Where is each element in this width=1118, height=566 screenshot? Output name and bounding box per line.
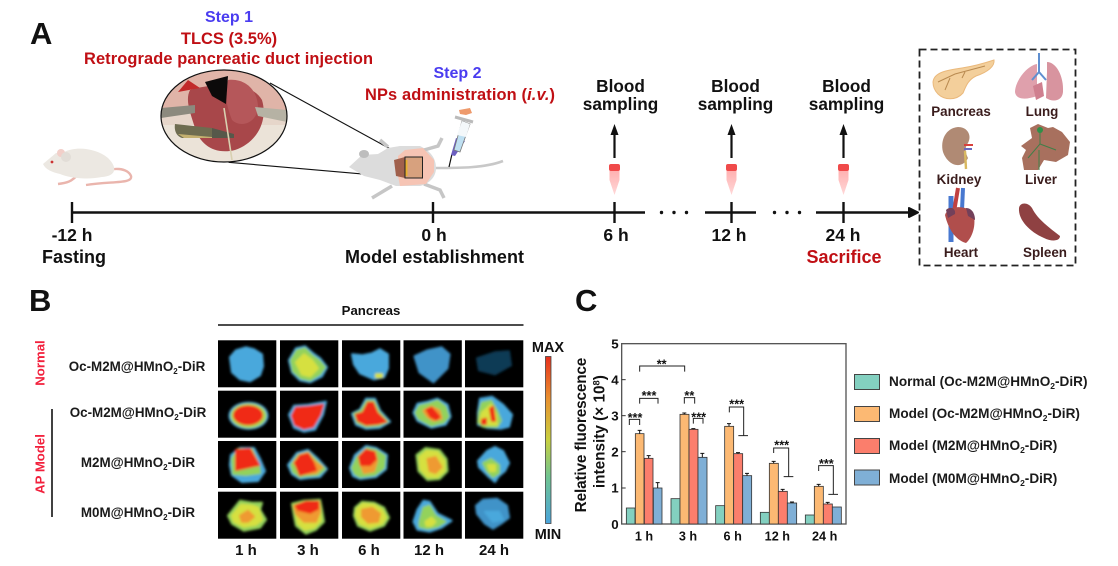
- zoom connector lines: [229, 83, 405, 178]
- y axis ticks: 2: [611, 445, 619, 460]
- x axis labels: [635, 529, 837, 543]
- hour labels: 24 h: [479, 542, 509, 559]
- icon: spleen: [1019, 204, 1060, 240]
- significance brackets: ***: [819, 457, 834, 471]
- image grid: [218, 340, 523, 539]
- significance brackets: ***: [642, 389, 656, 403]
- tile: Normal 6 h: [342, 340, 400, 387]
- legend: 2: [1020, 478, 1025, 488]
- y axis ticks: 1: [611, 481, 619, 496]
- tile: M0M 24 h: [465, 492, 523, 539]
- panel letter B: B: [29, 283, 51, 318]
- label: pancreas: Pancreas: [931, 104, 991, 119]
- bars: 3 h: [671, 413, 707, 524]
- row labels: M0M@HMnO: [81, 505, 163, 520]
- tile: Oc-M2M 24 h: [465, 391, 523, 438]
- icon: syringe: [449, 108, 473, 167]
- legend: -DiR): [1025, 438, 1057, 453]
- legend: 2: [1043, 413, 1048, 423]
- tile: Normal 1 h: [218, 340, 276, 387]
- tile: M2M 12 h: [404, 441, 462, 488]
- tile: M0M 3 h: [280, 492, 338, 539]
- icon: kidney: [942, 127, 973, 169]
- timeline labels: 6 h: [603, 225, 629, 245]
- x axis labels: 1 h: [635, 529, 653, 543]
- y axis title: [573, 358, 609, 512]
- bars: 6 h: [716, 424, 752, 524]
- y axis ticks: 0: [611, 517, 619, 532]
- hour labels: 6 h: [358, 542, 380, 559]
- hour labels: 3 h: [297, 542, 319, 559]
- row labels: -DiR: [179, 405, 207, 420]
- y axis title: 8: [592, 380, 602, 385]
- significance brackets: ***: [628, 411, 642, 425]
- legend: -DiR): [1025, 471, 1057, 486]
- bars: 1 h: [626, 430, 662, 524]
- row labels: 2: [163, 463, 168, 472]
- blood sampling at 12 h: [698, 76, 773, 195]
- tile: M2M 6 h: [342, 441, 400, 488]
- panel: organs box: [920, 50, 1076, 266]
- tile: M2M 1 h: [218, 441, 276, 488]
- tile: Oc-M2M 6 h: [342, 391, 400, 438]
- timeline labels: 0 h: [421, 225, 447, 245]
- x axis labels: 24 h: [812, 529, 837, 543]
- label: spleen: Spleen: [1023, 245, 1067, 260]
- legend: 2: [1050, 381, 1055, 391]
- legend: [854, 374, 1087, 488]
- tile: Oc-M2M 12 h: [404, 391, 462, 438]
- legend: Model (Oc-M2M@HMnO: [889, 406, 1043, 421]
- significance brackets: **: [684, 389, 694, 403]
- step 1 heading: Step 1: [205, 9, 253, 26]
- tile: Oc-M2M 3 h: [280, 391, 338, 438]
- timeline labels: 12 h: [711, 225, 747, 245]
- significance brackets: **: [657, 358, 667, 372]
- step 1 description: TLCS (3.5%): [181, 30, 277, 48]
- plot frame: [622, 344, 846, 524]
- significance brackets: ***: [729, 397, 744, 411]
- label: kidney: Kidney: [937, 172, 982, 187]
- colour scale bar: MAX: [532, 340, 564, 356]
- timeline labels: Sacrifice: [806, 247, 882, 267]
- row labels: -DiR: [168, 455, 195, 470]
- step 1 description: [84, 30, 373, 68]
- tile: Normal 3 h: [280, 340, 338, 387]
- timeline labels: [42, 225, 882, 267]
- icon: surgery photo in magnifier: [160, 70, 288, 165]
- timeline labels: -12 h: [52, 225, 92, 245]
- significance brackets: ***: [774, 439, 789, 453]
- blood sampling at 24 h: Blood: [822, 76, 871, 96]
- legend: Model (M2M@HMnO: [889, 438, 1020, 453]
- icon: pancreas: [933, 60, 994, 99]
- blood sampling at 6 h: [583, 76, 658, 195]
- x axis labels: 3 h: [679, 529, 697, 543]
- bars: 12 h: [760, 461, 797, 524]
- tile: M2M 3 h: [280, 441, 338, 488]
- panel B: fluorescence images: [29, 283, 564, 559]
- significance brackets: ***: [691, 411, 706, 425]
- row labels: 2: [174, 413, 179, 422]
- tile: Normal 12 h: [404, 340, 462, 387]
- timeline labels: 24 h: [825, 225, 861, 245]
- step 2 description: NPs administration (i.v.): [365, 86, 555, 104]
- hour labels: [235, 542, 509, 559]
- colour scale bar: MIN: [535, 527, 561, 543]
- icon: fasting mouse: [43, 149, 131, 185]
- heading: Pancreas: Pancreas: [342, 303, 400, 318]
- step 1 description: Retrograde pancreatic duct injection: [84, 50, 373, 68]
- blood sampling at 24 h: [809, 76, 884, 195]
- legend: Normal (Oc-M2M@HMnO: [889, 374, 1050, 389]
- legend: Model (M0M@HMnO: [889, 471, 1020, 486]
- tile: Normal 24 h: [465, 340, 523, 387]
- timeline labels: Model establishment: [345, 247, 524, 267]
- hour labels: 1 h: [235, 542, 257, 559]
- row labels: Oc-M2M@HMnO: [69, 359, 173, 374]
- hour labels: 12 h: [414, 542, 444, 559]
- colour scale bar: [532, 340, 564, 543]
- panel A: experimental timeline: [30, 9, 1076, 267]
- icon: heart: [945, 188, 975, 243]
- y axis title: ): [592, 375, 609, 380]
- tile: Oc-M2M 1 h: [218, 391, 276, 438]
- row labels: -DiR: [168, 505, 195, 520]
- y axis title: intensity (× 10: [592, 385, 609, 488]
- blood sampling at 12 h: Blood: [711, 76, 760, 96]
- panel letter C: C: [575, 283, 597, 318]
- blood sampling at 24 h: sampling: [809, 94, 884, 114]
- tile: M0M 12 h: [404, 492, 462, 539]
- y axis ticks: [611, 337, 626, 532]
- legend: -DiR): [1055, 374, 1087, 389]
- panel letter A: A: [30, 16, 52, 51]
- x axis labels: 12 h: [765, 529, 790, 543]
- tile: M0M 1 h: [218, 492, 276, 539]
- icon: lung: [1015, 53, 1063, 100]
- panel C: bar chart: [573, 283, 1087, 543]
- step 2 heading: Step 2: [433, 65, 482, 82]
- row labels: [69, 359, 207, 522]
- icon: liver: [1021, 124, 1070, 170]
- bars: 24 h: [805, 484, 841, 524]
- tile: M2M 24 h: [465, 441, 523, 488]
- blood sampling at 6 h: Blood: [596, 76, 645, 96]
- y axis ticks: 4: [611, 373, 619, 388]
- row labels: Oc-M2M@HMnO: [70, 405, 174, 420]
- significance brackets: [628, 358, 838, 494]
- tile: M0M 6 h: [342, 492, 400, 539]
- y axis title: Relative fluorescence: [573, 358, 590, 512]
- bar chart: [573, 337, 846, 543]
- row labels: 2: [173, 367, 178, 376]
- label: liver: Liver: [1025, 172, 1058, 187]
- legend: 2: [1020, 445, 1025, 455]
- blood sampling at 6 h: sampling: [583, 94, 658, 114]
- legend: -DiR): [1047, 406, 1080, 421]
- timeline axis: [72, 202, 918, 223]
- group label: Normal: Normal: [32, 340, 48, 386]
- label: lung: Lung: [1026, 104, 1058, 119]
- y axis ticks: 5: [611, 337, 619, 352]
- timeline gap dots: [660, 211, 801, 214]
- y axis ticks: 3: [611, 409, 619, 424]
- row labels: 2: [163, 513, 168, 522]
- icon: dissected mouse with syringe: [349, 138, 503, 198]
- row labels: M2M@HMnO: [81, 455, 163, 470]
- row labels: -DiR: [178, 359, 206, 374]
- label: heart: Heart: [944, 245, 979, 260]
- timeline labels: Fasting: [42, 247, 106, 267]
- blood sampling at 12 h: sampling: [698, 94, 773, 114]
- x axis labels: 6 h: [724, 529, 742, 543]
- group label: AP Model: AP Model: [32, 434, 48, 494]
